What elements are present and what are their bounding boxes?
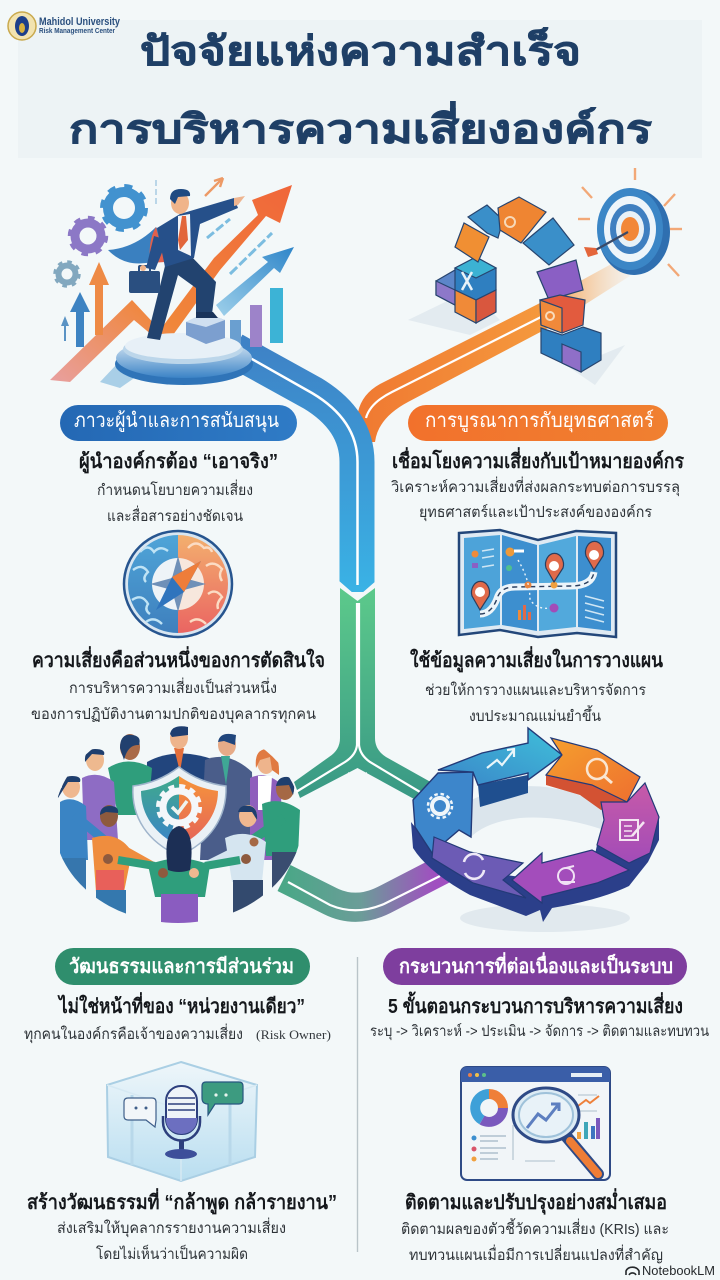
heading: monitor and improve: ติดตามและปรับปรุงอย่างสม่ำเสมอ: [405, 1187, 667, 1215]
icon: arch of blocks and target: [408, 168, 682, 385]
gears: [55, 186, 146, 286]
head: [171, 192, 189, 214]
panel: leadership pill: [60, 405, 297, 441]
text: leadership policy: และสื่อสารอย่างชัดเจน: [107, 505, 243, 525]
title band: [18, 20, 702, 158]
panel: leadership pill: ภาวะผู้นำและการสนับสนุน: [74, 410, 279, 433]
icon: team around shield: [55, 726, 300, 926]
left small cube: [436, 197, 601, 372]
text: risk in daily work: ของการปฏิบัติงานตามปกติของบุคลากรทุกคน: [31, 706, 316, 724]
icon: route map: [459, 530, 616, 637]
mini charts: [578, 1095, 597, 1111]
logo: Mahidol University Risk Management Center: Risk Management Center: [39, 26, 115, 35]
green speech bubble: [202, 1082, 243, 1115]
icon: five step cycle: [411, 728, 659, 932]
cycle base: [411, 817, 659, 922]
text: encourage reporting: [57, 1217, 286, 1263]
title line 2: การบริหารความเสี่ยงองค์กร: [69, 101, 653, 152]
text: risk in daily work: [31, 677, 316, 724]
map pins: [472, 541, 603, 610]
shield: [133, 767, 226, 856]
text: everyone is risk owner: [24, 1023, 331, 1044]
divider: [356, 957, 358, 1252]
left base cubes: [455, 257, 496, 300]
text: planning and budget: งบประมาณแม่นยำขึ้น: [469, 705, 601, 725]
inner hole shadow: [470, 786, 604, 838]
heading: not one unit's job: ไม่ใช่หน้าที่ของ “หน่วยงานเดียว”: [57, 991, 305, 1018]
cycle shadow: [460, 904, 630, 932]
logo: Mahidol University Risk Management Center: Mahidol University: [39, 16, 121, 28]
text: leadership policy: กำหนดนโยบายความเสี่ยง: [97, 479, 253, 499]
icon: brain compass: [124, 531, 232, 637]
target rays: [578, 168, 682, 276]
pathway: blue road: [234, 350, 377, 606]
step: identify teal: [478, 775, 528, 807]
platform: [115, 343, 253, 385]
rising blue arrow: [216, 247, 294, 316]
panel: culture pill: [55, 948, 310, 985]
up arrows: [89, 262, 109, 335]
heading: brave to speak: สร้างวัฒนธรรมที่ “กล้าพูด กล้ารายงาน”: [27, 1187, 337, 1216]
text: risk in daily work: การบริหารความเสี่ยงเป็นส่วนหนึ่ง: [69, 677, 277, 697]
panel: strategy pill: [408, 405, 668, 441]
heading: risk is part of decision: ความเสี่ยงคือส่วนหนึ่งของการตัดสินใจ: [32, 645, 325, 672]
text: strategy analysis: วิเคราะห์ความเสี่ยงที่ส่งผลกระทบต่อการบรรลุ: [390, 476, 680, 497]
list rows: [472, 1136, 476, 1140]
step block: [186, 313, 225, 344]
logo: Mahidol University Risk Management Center: [8, 12, 121, 40]
text: monitor KRIs: ติดตามผลของตัวชี้วัดความเสี่ยง (KRIs) และ: [401, 1218, 669, 1238]
side people: [60, 799, 88, 860]
text: planning and budget: [425, 681, 646, 725]
panel: strategy pill: การบูรณาการกับยุทธศาสตร์: [425, 409, 654, 433]
pathway: green to purple lower road: [284, 868, 446, 910]
pathway: orange road: [358, 262, 630, 442]
text: monitor KRIs: ทบทวนแผนเมื่อมีการเปลี่ยนแปลงที่สำคัญ: [409, 1244, 663, 1264]
text: leadership policy: [97, 479, 253, 525]
heading: leaders must be serious: ผู้นำองค์กรต้อง “เอาจริง”: [79, 450, 278, 475]
arrow in target: [592, 232, 628, 252]
text: everyone is risk owner: ทุกคนในองค์กรคือเจ้าของความเสี่ยง: [24, 1023, 243, 1044]
icon: leader on platform with rising arrows: [50, 178, 294, 388]
text: everyone is risk owner: (Risk Owner): [256, 1027, 331, 1042]
arch segments: [455, 223, 489, 262]
step: assess magenta: [597, 783, 659, 863]
text: encourage reporting: ส่งเสริมให้บุคลากรรายงานความเสี่ยง: [57, 1217, 286, 1238]
step: analyze orange: [546, 775, 627, 810]
briefcase: [129, 271, 160, 293]
suit torso and arm: [157, 198, 238, 267]
icon: dashboard with magnifier: [461, 1067, 610, 1180]
shadows: [408, 290, 500, 335]
heading: link risk with goals: เชื่อมโยงความเสี่ยงกับเป้าหมายองค์กร: [392, 446, 684, 473]
title line 1: ปัจจัยแห่งความสำเร็จ: [140, 26, 581, 74]
microphone: [166, 1086, 197, 1134]
watermark: NotebookLM: NotebookLM: [642, 1264, 715, 1278]
text: encourage reporting: โดยไม่เห็นว่าเป็นความผิด: [96, 1244, 248, 1263]
step: treat purple arrow: [512, 850, 629, 903]
icon: microphone in glass box: [107, 1062, 257, 1181]
donut chart: [475, 1094, 503, 1122]
text: monitor KRIs: [401, 1218, 669, 1264]
legs: [147, 255, 216, 340]
bars: [250, 305, 262, 347]
text: strategy analysis: [390, 476, 680, 522]
white speech bubble: [124, 1098, 156, 1127]
text: strategy analysis: ยุทธศาสตร์และเป้าประสงค์ขององค์กร: [419, 504, 652, 522]
heading: use risk data in planning: ใช้ข้อมูลความเสี่ยงในการวางแผน: [410, 645, 663, 674]
panel: culture pill: วัฒนธรรมและการมีส่วนร่วม: [69, 955, 294, 978]
right stacks: [540, 295, 585, 333]
rising orange arrow: [50, 185, 292, 382]
map details: [472, 550, 478, 558]
back row people: [146, 754, 210, 782]
heading: five steps: 5 ขั้นตอนกระบวนการบริหารความเสี่ยง: [388, 991, 683, 1018]
map route: [480, 572, 594, 614]
step: review violet: [432, 837, 526, 898]
pathway: green road with branches: [294, 588, 436, 805]
text: planning and budget: ช่วยให้การวางแผนและบริหารจัดการ: [425, 681, 646, 699]
target: [598, 189, 670, 275]
cape: [108, 227, 170, 264]
front people: [92, 836, 132, 892]
panel: process pill: [383, 948, 687, 985]
step: monitor blue: [413, 772, 473, 853]
magnifier: [566, 1136, 598, 1174]
panel: process pill: กระบวนการที่ต่อเนื่องและเป็นระบบ: [399, 951, 673, 978]
